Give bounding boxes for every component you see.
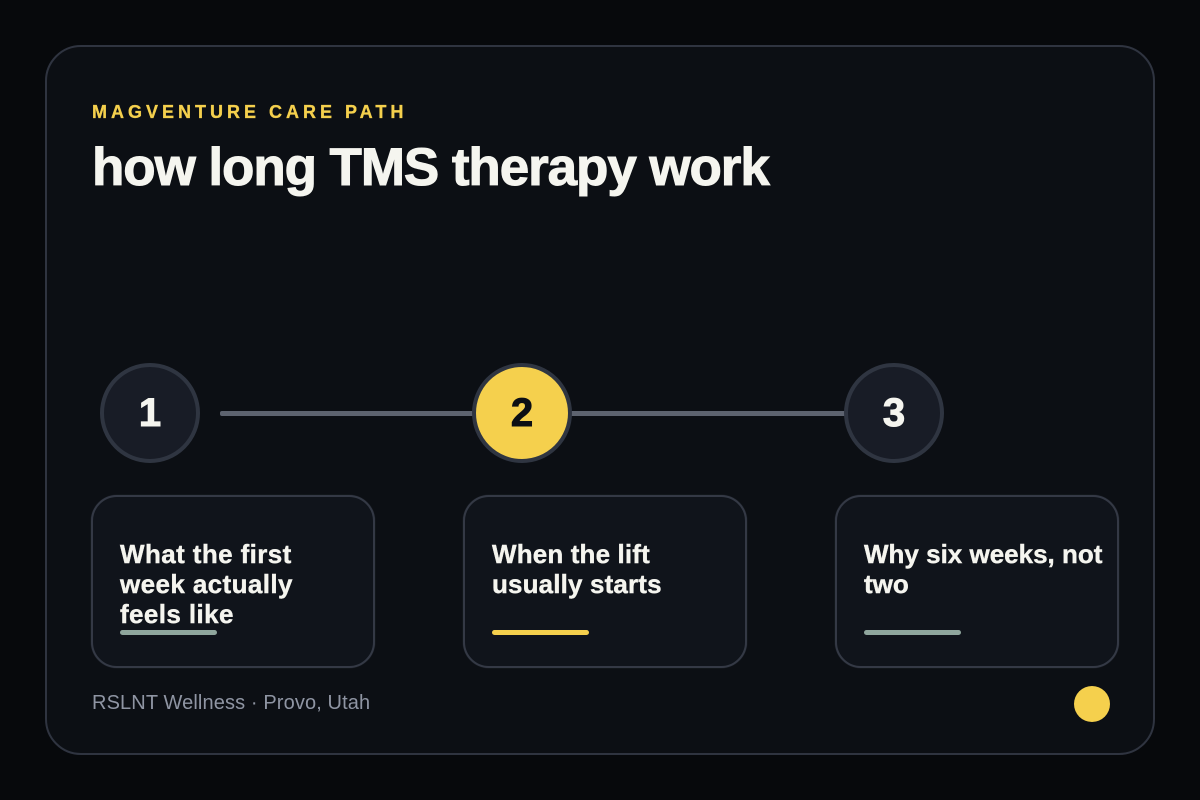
card 2 accent bar — [492, 630, 589, 635]
connector line: step 2 to step 3 — [570, 411, 846, 416]
footer text: RSLNT Wellness · Provo, Utah — [92, 692, 370, 714]
step marker 3: 3 — [883, 391, 905, 435]
step marker 1 — [100, 363, 200, 463]
card: step 3 — [835, 495, 1119, 668]
card 3 heading — [864, 539, 1102, 599]
card 2 heading — [492, 539, 662, 599]
title: how long TMS therapy work — [92, 138, 769, 197]
card 3 heading: Why six weeks, not — [864, 539, 1102, 569]
step marker 2 (active): 2 — [511, 391, 533, 435]
card 1 heading: week actually — [120, 569, 293, 599]
step marker 2 (active) — [472, 363, 572, 463]
card: step 1 — [91, 495, 375, 668]
connector line: step 1 to step 2 — [220, 411, 474, 416]
card 1 heading: What the first — [120, 539, 292, 569]
brand dot — [1074, 686, 1110, 722]
card 1 heading: feels like — [120, 599, 234, 629]
eyebrow label: MAGVENTURE CARE PATH — [92, 102, 407, 122]
card 1 heading — [120, 539, 293, 629]
card 3 heading: two — [864, 569, 909, 599]
card 2 heading: When the lift — [492, 539, 650, 569]
card 1 accent bar — [120, 630, 217, 635]
card 3 accent bar — [864, 630, 961, 635]
card 2 heading: usually starts — [492, 569, 662, 599]
card: step 2 — [463, 495, 747, 668]
step marker 1: 1 — [139, 391, 161, 435]
step marker 3 — [844, 363, 944, 463]
